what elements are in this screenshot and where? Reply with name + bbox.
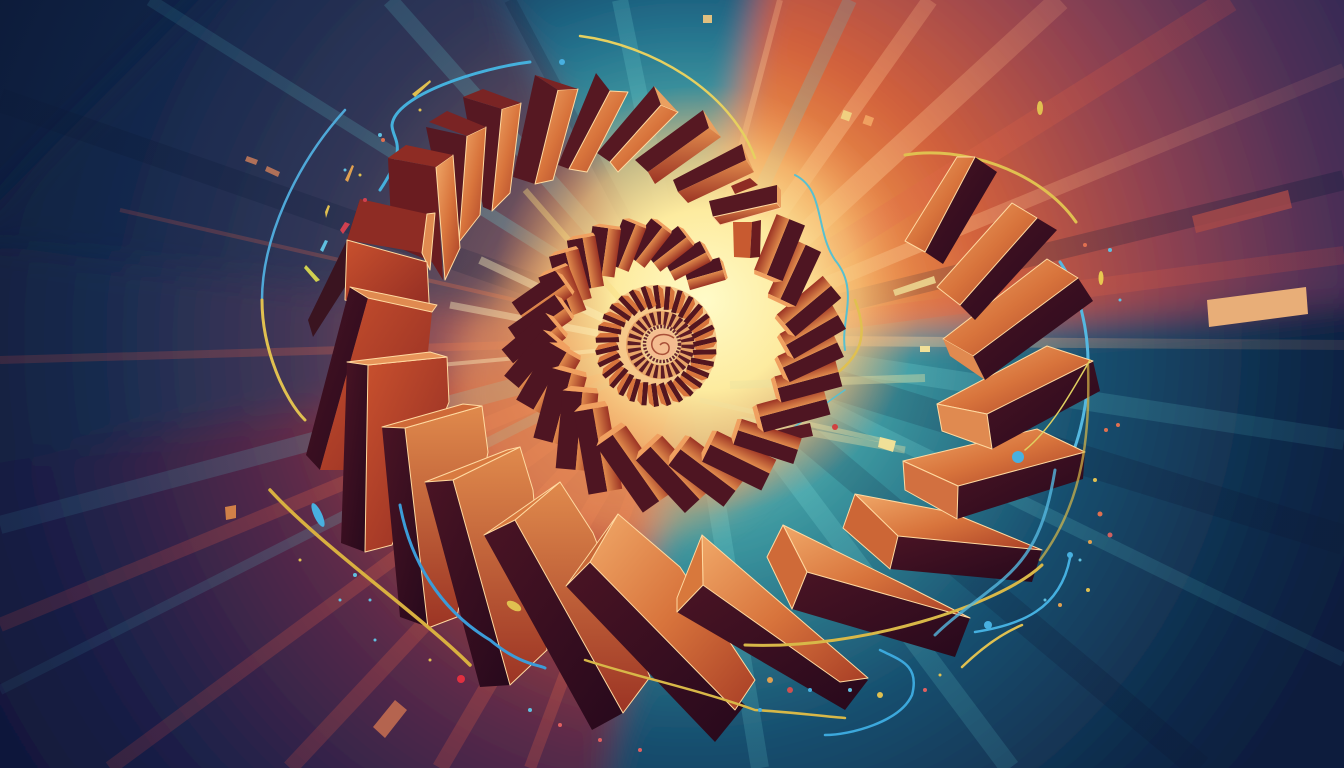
domino T2 [673,144,754,203]
domino L14 [943,259,1093,380]
domino L13 [937,346,1100,449]
particles: paint confetti [298,59,1122,752]
domino T4 [597,86,678,172]
domino T6 [513,75,578,184]
domino L16 [905,157,997,264]
domino T8 [426,111,486,242]
domino T3 [635,110,721,184]
domino T5 [558,73,628,172]
domino T1 rear post [731,178,761,258]
domino L12 [903,429,1085,519]
outer domino chain: top arc [388,73,781,280]
domino L1 [320,199,435,300]
domino L8 [566,514,755,742]
domino L15 [937,203,1057,320]
domino L11 [843,494,1042,582]
rosette: innermost domino spiral [597,285,717,405]
domino L4 [341,352,449,552]
central rays between dominoes [440,190,925,450]
ribbons: over the dominoes [270,360,1090,735]
domino T9 [388,145,460,280]
domino L5 [382,404,488,628]
domino T1 [709,185,781,225]
domino L9 [677,535,868,710]
domino L3 [306,287,437,470]
floating colour bars [225,15,1308,738]
background: central glow [450,85,920,540]
domino T7 [463,89,521,211]
domino L10 [767,525,970,657]
domino L6 [425,447,547,687]
domino L2 [308,240,430,337]
ring: middle domino spiral [502,214,846,513]
outer domino chain: left and bottom [306,157,1100,742]
ring: second domino spiral [594,284,718,408]
ribbons: behind the dominoes [262,36,1088,480]
domino L7 [484,482,650,730]
